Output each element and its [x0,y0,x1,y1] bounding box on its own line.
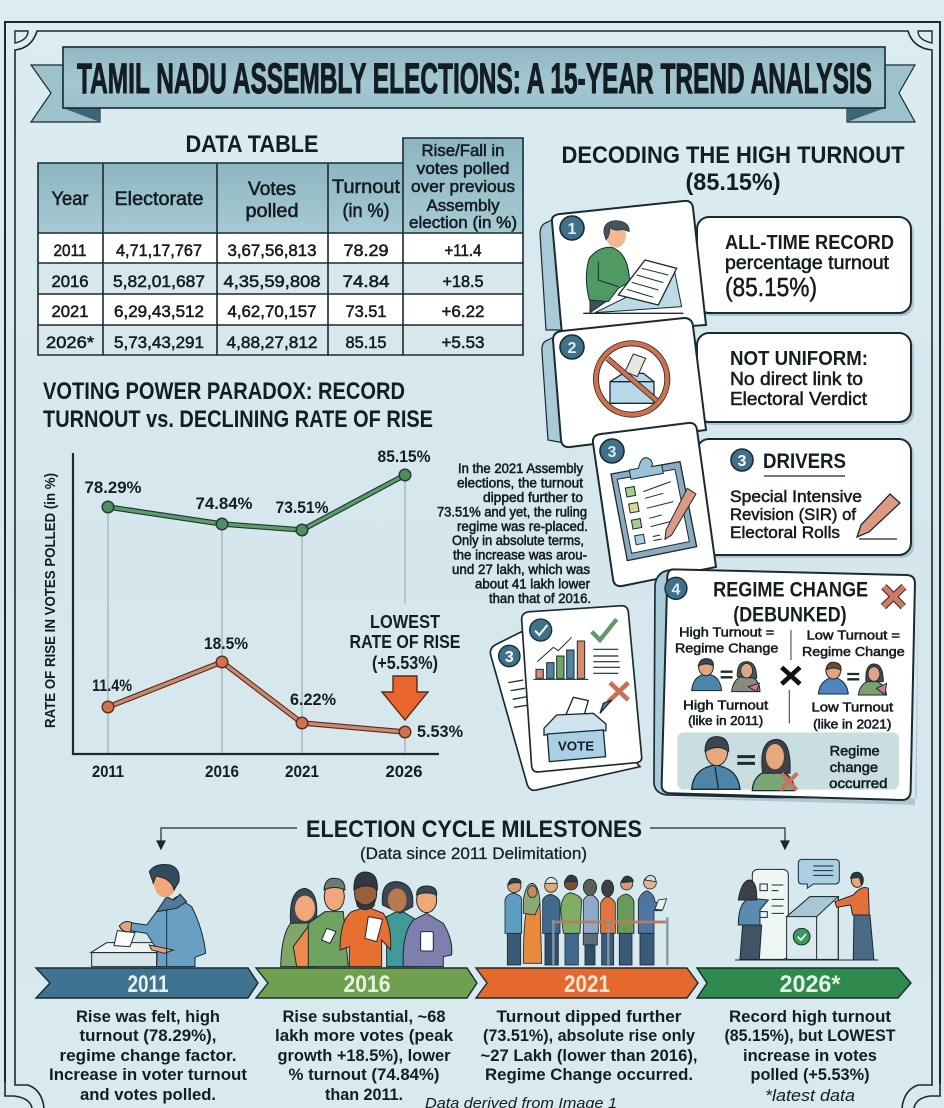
annotation: 2021 note: und 27 lakh, which was [452,562,590,577]
card 2 text [730,348,868,409]
callout: lowest rate of rise: LOWEST [370,612,440,632]
panel: regime change debunked: High Turnout [683,697,768,712]
data table: 3,67,56,813 [228,241,316,260]
card: voter at EVM: 1 [568,221,577,238]
annotation: 2021 note: dipped further to [483,490,583,505]
annotation: 2021 note: regime was re-placed. [457,519,588,534]
callout: regime change occurred [677,732,899,791]
line chart: 2011 [92,763,124,781]
data table: 5,82,01,687 [113,272,205,291]
text block: 2016: % turnout (74.84%) [288,1065,440,1084]
text block: 2011: turnout (78.29%), [80,1026,216,1045]
text block: 2016 [275,1007,454,1104]
card: checklist [593,423,716,586]
icon: people pair left [692,659,760,692]
heading: decoding the high turnout: (85.15%) [686,169,780,196]
heading: election cycle milestones: ELECTION CYCLE MILESTONES [306,816,642,843]
text block: 2011: Rise was felt, high [76,1007,220,1026]
card: not uniform: 2 [568,340,577,357]
icon: pencil [857,494,900,539]
timeline ribbon: 2026: 2026* [780,971,841,998]
heading: data table: DATA TABLE [186,131,318,158]
data table: Assembly [426,196,500,215]
annotation: 2021 note: 73.51% and yet, the ruling [437,504,587,520]
data table: (in %) [342,201,390,222]
text block: 2021: (73.51%), absolute rise only [483,1026,696,1045]
text block: 2021: ~27 Lakh (lower than 2016), [480,1046,698,1065]
text block: 2011: regime change factor. [60,1046,236,1065]
card 3 text: DRIVERS [763,450,846,473]
card 3 text [730,449,862,542]
text block: 2016: Rise substantial, ~68 [282,1007,446,1026]
card: checklist: 3 [608,444,617,461]
heading: voting power paradox: VOTING POWER PARADOX: RECORD [43,378,405,405]
data table: 78.29 [344,241,388,260]
annotation: 2021 note: Only in absolute terms, [452,533,584,548]
timeline ribbon: 2016: 2016 [344,971,390,998]
panel: tilted icon cards [540,201,716,586]
line chart: 73.51% [276,498,328,517]
card 3 text: 3 [738,453,747,470]
heading: voting power paradox [43,378,433,433]
data table: 2011 [54,241,86,260]
line chart: 2026 [386,763,422,781]
text block: 2011 [49,1007,247,1104]
icon: queue of voters [505,875,667,965]
data table: 4,62,70,157 [228,302,316,321]
callout: regime change occurred: Regime [830,742,880,758]
panel: regime change debunked [654,569,919,805]
card 1 text [725,232,894,302]
icon: electronic voting scene [735,859,878,960]
callout: lowest rate of rise: RATE OF RISE [350,632,460,652]
annotation: 2021 note: In the 2021 Assembly [458,461,583,476]
heading: election cycle milestones [306,816,642,863]
card 3 text: Special Intensive [730,487,862,506]
data table: over previous [411,177,515,196]
data table: Turnout [332,177,401,198]
panel: card 3 vote checklist [490,606,642,790]
panel: regime change debunked: Regime Change [675,641,778,656]
timeline ribbon: 2021: 2021 [564,971,610,998]
icon: group of voters [281,872,452,967]
line chart [42,447,463,781]
text block: 2026: Record high turnout [729,1007,891,1026]
panel: regime change debunked: Low Turnout = [807,627,900,642]
line chart: 6.22% [290,690,336,709]
line chart: 2021 [285,763,319,781]
data table: 74.84 [342,272,390,291]
icon: black cross [782,667,800,684]
data table: 5,73,43,291 [114,333,204,352]
text block: 2016: than 2011. [325,1085,403,1104]
card 3 text: Electoral Rolls [730,523,840,542]
icon: red cross with pen [608,683,628,702]
card 3 text: Revision (SIR) of [730,505,856,524]
icon: red cross [883,587,904,607]
icon: vote box: VOTE [558,739,594,754]
heading: election cycle milestones: (Data since 2011 Delimitation) [360,845,587,863]
annotation: 2021 note: than that of 2016. [489,591,591,606]
annotation: 2021 note: the increase was arou- [453,548,587,562]
rate of rise line [102,656,411,738]
heading: voting power paradox: TURNOUT vs. DECLINING RATE OF RISE [43,406,433,433]
arrow: down [382,676,428,720]
data table: 85.15 [346,333,386,352]
card 2 text: Electoral Verdict [730,389,867,409]
arrow: left bracket [157,828,297,849]
arrow: right bracket [650,828,789,849]
icon: voter casting ballot [91,865,206,967]
callout: regime change occurred: occurred [829,775,887,791]
callout: lowest rate of rise: (+5.53%) [372,653,438,673]
icon: clipboard [611,458,697,561]
panel: regime change debunked: Regime Change [802,644,905,659]
data table: +6.22 [442,302,484,321]
data table: 73.51 [346,302,386,321]
data table: 4,35,59,808 [224,272,320,291]
data table: 2016 [52,272,88,291]
callout: lowest rate of rise [350,612,460,720]
panel: card 3 vote checklist: 3 [505,649,514,666]
card 1 text: percentage turnout [725,253,890,274]
text block: 2026: *latest data [765,1086,855,1105]
panel: regime change debunked: High Turnout = [679,625,774,640]
data table: 4,88,27,812 [226,333,318,352]
data table: Votes [248,179,296,200]
panel: right text cards [697,217,914,558]
card title: REGIME CHANGE [713,579,868,602]
timeline ribbon: 2011: 2011 [128,971,168,998]
line chart: 74.84% [196,494,252,513]
text block: 2011: Increase in voter turnout [49,1065,247,1084]
icon: voter at EVM [583,221,683,313]
data table: votes polled [416,159,510,178]
panel: regime change debunked: (like in 2011) [688,714,763,728]
data table: +5.53 [442,333,484,352]
timeline ribbon: 2021 [476,968,698,998]
data table: polled [246,201,298,222]
data table: Rise/Fall in [422,141,504,160]
line chart: 18.5% [204,634,248,653]
line chart: 2016 [205,763,239,781]
heading: decoding the high turnout: DECODING THE HIGH TURNOUT [562,142,905,169]
text block: 2026: polled (+5.53%) [750,1065,870,1084]
text block: 2026: (85.15%), but LOWEST [724,1026,896,1045]
icon: no ballot box [596,343,667,415]
panel: regime change debunked: 4 [672,581,681,598]
data table: 2026* [46,333,94,352]
panel: regime change debunked: Low Turnout [811,700,893,715]
data table: Electorate [114,189,204,210]
annotation: 2021 note [437,461,591,606]
text block: 2016: growth +18.5%), lower [278,1046,451,1065]
icon: bar chart [533,637,588,679]
data table: Year [52,189,89,210]
line chart: 11.4% [92,676,132,695]
icon: people pair right [818,662,887,695]
data table: +11.4 [444,241,482,260]
text block: 2026 [724,1007,896,1105]
panel: regime change debunked: (DEBUNKED) [733,604,847,627]
line chart: 78.29% [84,478,142,497]
text block: 2026: increase in votes [743,1046,877,1065]
card 2 text: No direct link to [730,369,863,389]
text block: 2016: lakh more votes (peak [275,1026,454,1045]
annotation: 2021 note: about 41 lakh lower [475,576,590,592]
text block: 2021: Regime Change occurred. [485,1065,693,1084]
card 1 text: (85.15%) [725,272,817,302]
data table [38,138,523,355]
text block: 2011: and votes polled. [80,1085,216,1104]
text block: 2021: Turnout dipped further [496,1007,682,1026]
panel: regime change debunked: (like in 2021) [813,717,891,731]
turnout line [102,469,411,536]
timeline ribbon: 2026 [697,968,911,998]
line chart: 5.53% [417,722,463,741]
timeline ribbon: 2016 [256,968,477,998]
data table: 6,29,43,512 [114,302,204,321]
annotation: 2021 note: elections, the turnout [457,476,583,490]
card 2 text: NOT UNIFORM: [730,348,868,370]
text block: 2021 [480,1007,698,1084]
line chart: 85.15% [378,447,430,466]
icon: vote box [544,697,606,762]
card: voter at EVM [552,201,706,335]
card 1 text: ALL-TIME RECORD [725,232,894,254]
heading: decoding the high turnout [562,142,905,196]
card: not uniform [553,318,706,447]
data table: election (in %) [409,213,517,232]
icon: check mark [592,619,617,640]
timeline ribbon: 2011 [36,968,258,998]
y axis label: RATE OF RISE IN VOTES POLLED (in %) [42,473,59,728]
callout: regime change occurred: change [830,759,878,775]
data table: 4,71,17,767 [116,241,202,260]
title banner [31,47,915,122]
data table: +18.5 [442,272,484,291]
data table: 2021 [52,302,88,321]
